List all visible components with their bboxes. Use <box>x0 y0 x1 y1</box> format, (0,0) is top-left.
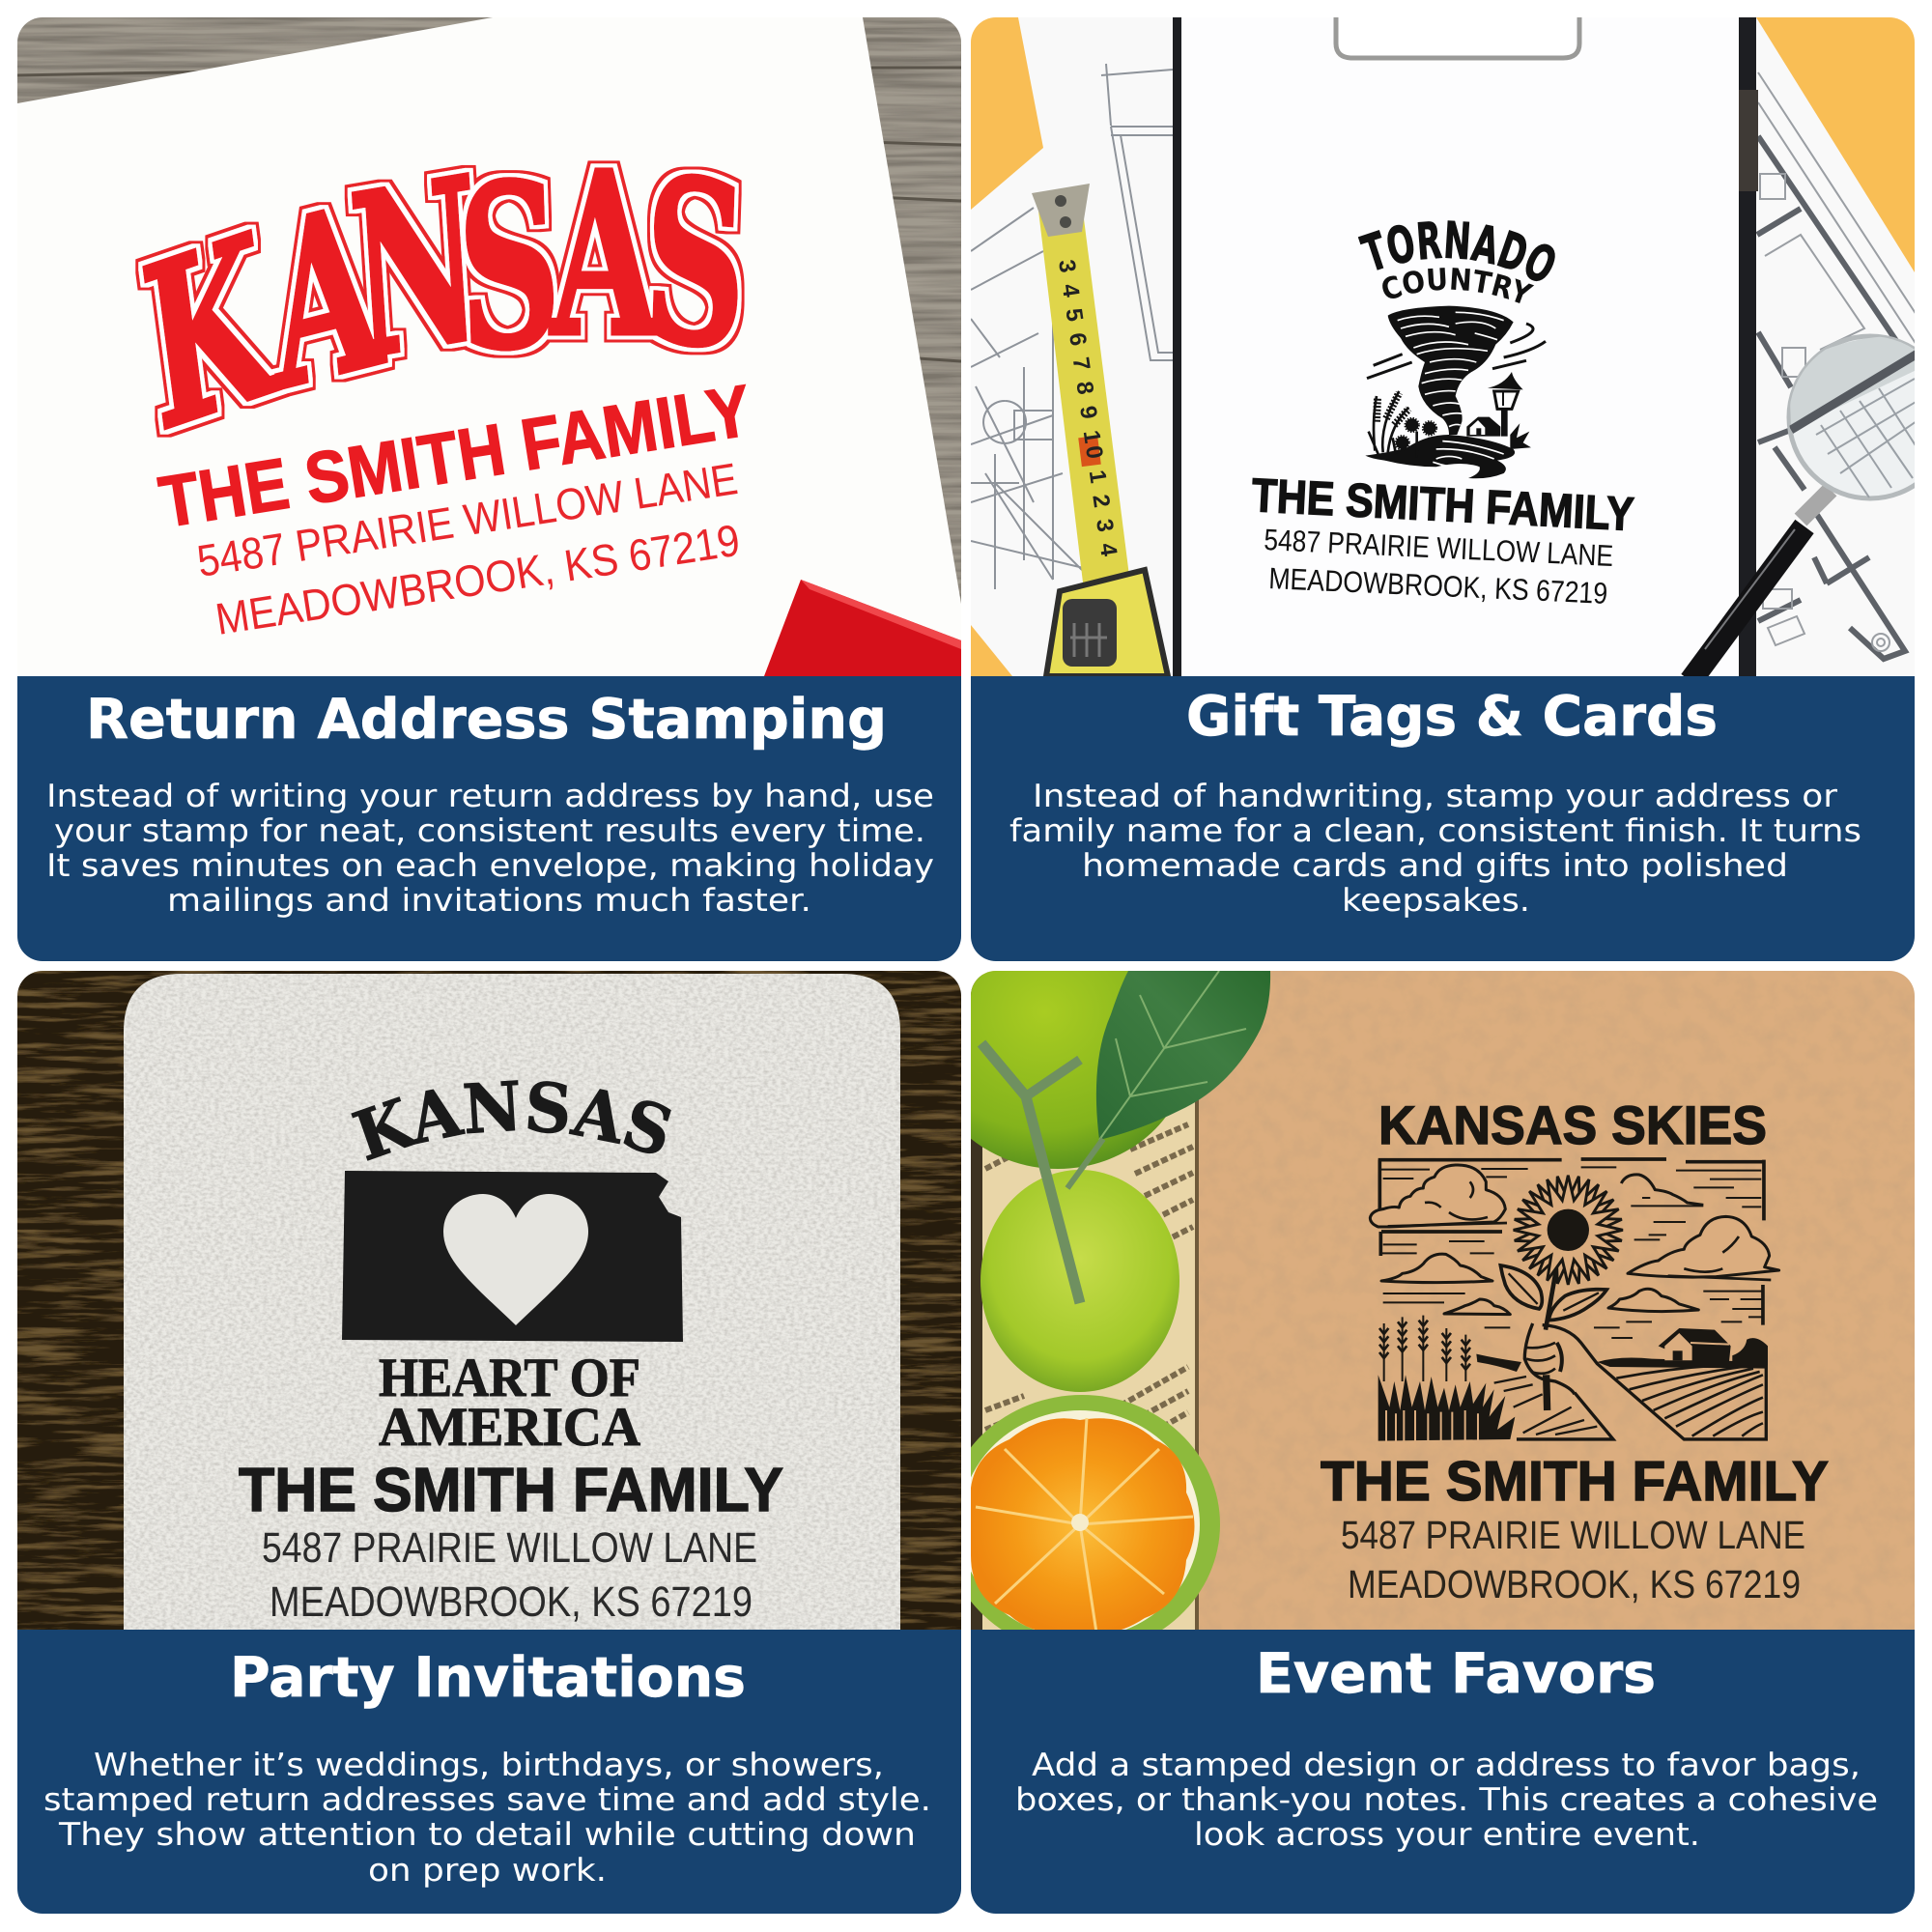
tape measure blade <box>1032 184 1128 582</box>
panel: party invitations <box>17 971 961 1914</box>
Kansas state silhouette with heart <box>342 1171 683 1342</box>
panel: gift tags and cards <box>971 17 1915 961</box>
clipboard <box>1173 17 1758 694</box>
body text: your stamp for neat, consistent results every time. <box>54 812 925 849</box>
blueprint lines: left sheet <box>971 64 1173 589</box>
stamp impression: family name: THE SMITH FAMILY <box>1250 469 1635 541</box>
newspaper strip <box>982 971 1199 1630</box>
clouds <box>1370 1165 1779 1315</box>
stamp impression: family name: THE SMITH FAMILY <box>1321 1450 1829 1513</box>
lamp post and grass <box>1488 372 1523 389</box>
hand and arm <box>1517 1323 1766 1439</box>
body text: Add a stamped design or address to favor bags, <box>1032 1747 1861 1783</box>
body text: homemade cards and gifts into polished <box>1082 847 1788 884</box>
body text: family name for a clean, consistent finish. It turns <box>1009 812 1861 849</box>
lime: upper <box>926 927 1189 1169</box>
stamp heading: Kansas Skies: KANSAS SKIES <box>1378 1094 1767 1155</box>
wind swirls <box>1367 324 1546 379</box>
body text: boxes, or thank-you notes. This creates a cohesive <box>1015 1781 1878 1818</box>
sky frame and lines <box>1378 1159 1765 1338</box>
wheat and grass <box>1378 1316 1515 1441</box>
slogan: heart of america: HEART OF <box>379 1348 640 1408</box>
lime: middle <box>980 1170 1179 1392</box>
arched words: COUNTRY <box>1382 268 1534 303</box>
caption: event favors <box>971 1630 1915 1914</box>
tornado illustration <box>1365 306 1546 478</box>
ground and water <box>1365 435 1515 478</box>
caption: party invitations <box>17 1630 961 1914</box>
textured coaster card <box>124 974 900 1642</box>
tape measure housing <box>1046 570 1168 676</box>
body text <box>1009 778 1861 919</box>
stamp impression: city line: MEADOWBROOK, KS 67219 <box>1268 561 1608 611</box>
road <box>1476 1354 1597 1435</box>
sunflower <box>1500 1166 1633 1410</box>
body text: mailings and invitations much faster. <box>167 882 811 919</box>
heading: Party Invitations <box>230 1646 746 1710</box>
body text <box>1015 1747 1878 1853</box>
slogan: heart of america <box>379 1348 640 1458</box>
citrus leaf <box>1096 971 1270 1140</box>
stamp impression: city line: MEADOWBROOK, KS 67219 <box>1348 1562 1801 1606</box>
heading: Return Address Stamping <box>86 688 887 752</box>
heading: Event Favors <box>1256 1642 1656 1706</box>
stamp impression: street address: 5487 PRAIRIE WILLOW LANE <box>194 453 741 586</box>
body text: Instead of handwriting, stamp your address or <box>1033 778 1838 814</box>
red stamp box <box>764 580 961 676</box>
body text: They show attention to detail while cutting down <box>58 1816 916 1853</box>
body text: It saves minutes on each envelope, making holiday <box>46 847 934 884</box>
photo: red Kansas stamp on white paper <box>17 17 961 676</box>
body text: keepsakes. <box>1342 882 1530 919</box>
panel: event favors <box>926 927 1915 1914</box>
tape measure numbers: 3 4 5 6 7 8 9 10 1 2 3 4 <box>1059 260 1117 556</box>
caption: return address stamping <box>17 676 961 961</box>
citrus stem <box>981 1043 1103 1303</box>
photo: Kansas heart stamp on textured card over dark wood <box>17 971 961 1630</box>
body text: look across your entire event. <box>1194 1816 1700 1853</box>
magnifying glass <box>1690 336 1932 681</box>
heading: Gift Tags & Cards <box>1186 685 1718 749</box>
stamp impression: street address: 5487 PRAIRIE WILLOW LANE <box>1264 523 1614 573</box>
caption: gift tags and cards <box>971 676 1915 961</box>
wheat and flowers <box>1369 391 1436 457</box>
paper sheet <box>17 17 961 676</box>
stamp impression: tornado country emblem <box>1358 220 1555 479</box>
body text: stamped return addresses save time and add style. <box>43 1781 931 1818</box>
stamp impression: family name: THE SMITH FAMILY <box>154 369 756 543</box>
panel: return address stamping <box>17 17 961 961</box>
photo: clipboard with tornado stamp, tape measure and magnifier <box>971 17 1915 676</box>
funnel <box>1388 306 1514 435</box>
stamp impression: street address: 5487 PRAIRIE WILLOW LANE <box>1341 1513 1805 1557</box>
body text: on prep work. <box>368 1852 607 1889</box>
barn <box>1466 417 1500 437</box>
halved citrus <box>944 1395 1220 1654</box>
ploughed field <box>1616 1365 1763 1436</box>
body text <box>46 778 934 919</box>
body text: Instead of writing your return address by hand, use <box>46 778 934 814</box>
body text: Whether it’s weddings, birthdays, or showers, <box>94 1747 884 1783</box>
photo: Kansas Skies stamp on kraft paper with citrus <box>926 927 1915 1654</box>
clipboard clip <box>1336 14 1579 58</box>
arched word KANSAS: KANSAS <box>351 1080 671 1161</box>
slogan: heart of america: AMERICA <box>379 1397 640 1458</box>
stamp illustration: sunflower, hand, clouds and farm <box>1370 1159 1779 1441</box>
stamp impression: city line: MEADOWBROOK, KS 67219 <box>213 515 743 644</box>
stamp impression: street address: 5487 PRAIRIE WILLOW LANE <box>262 1524 757 1572</box>
body text <box>43 1747 931 1889</box>
blueprint lines: right sheet <box>1757 136 1917 659</box>
stamp impression: family name: THE SMITH FAMILY <box>239 1455 783 1524</box>
stamp impression: city line: MEADOWBROOK, KS 67219 <box>270 1578 753 1626</box>
stamp impression: KANSAS varsity lettering: KANSAS <box>131 123 750 482</box>
horizon, barn and trees <box>1597 1328 1768 1369</box>
orange desk corners <box>971 17 1915 676</box>
arched words: TORNADO <box>1358 220 1555 282</box>
